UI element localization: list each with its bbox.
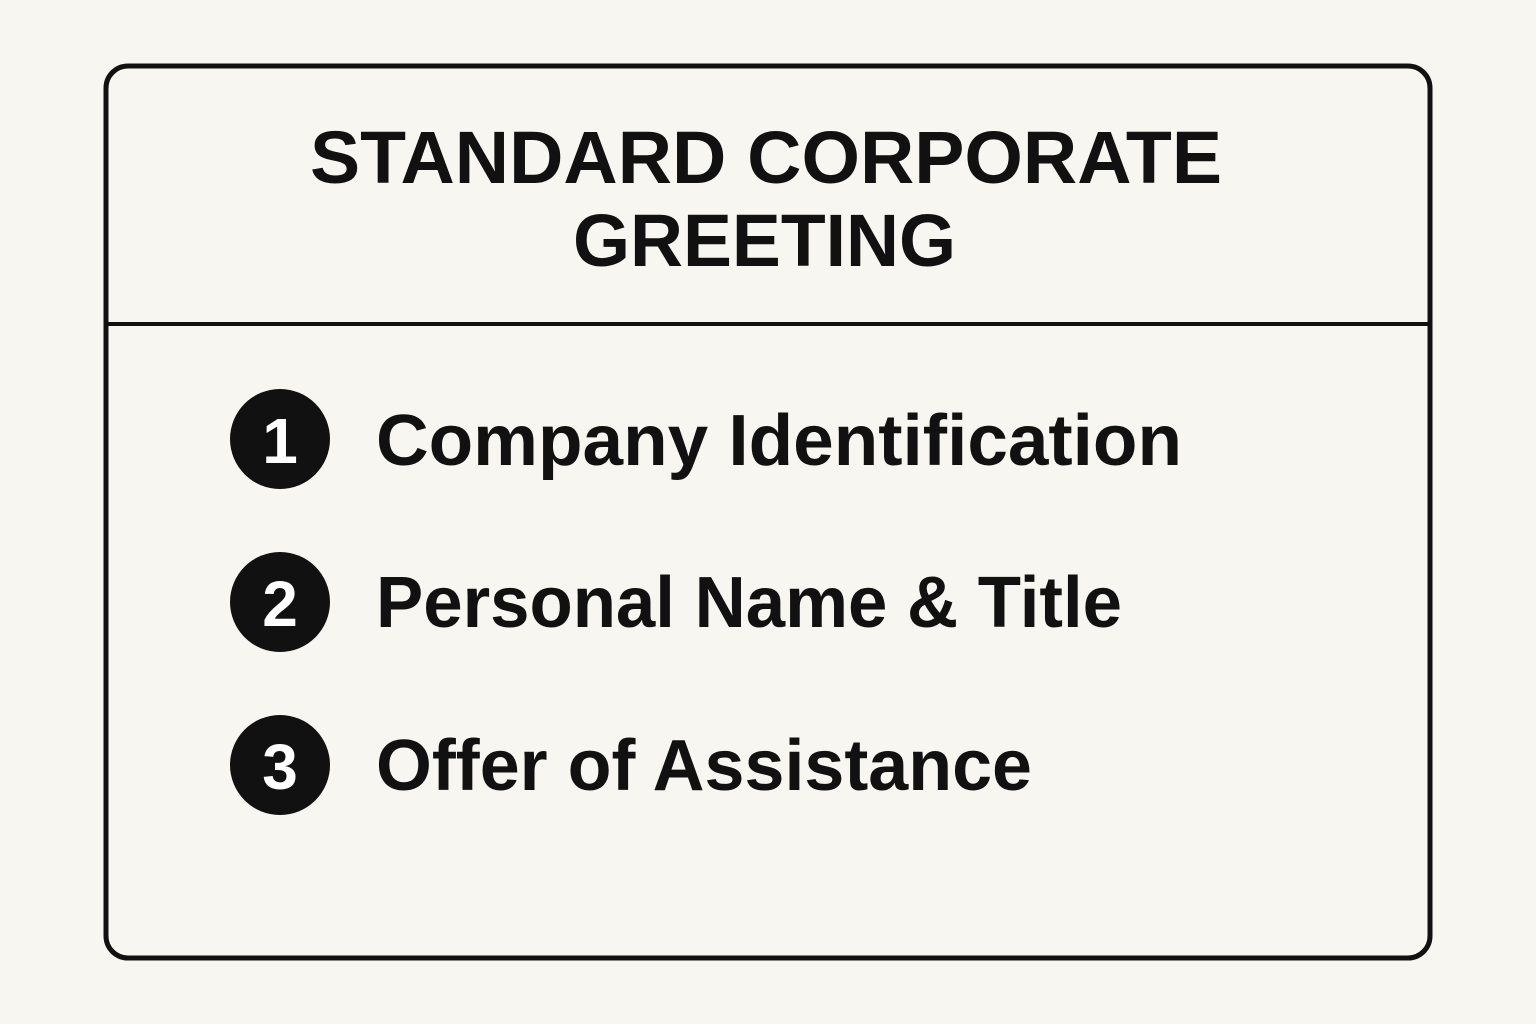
panel: greeting card xyxy=(106,66,1430,958)
item 3: Offer of Assistance xyxy=(230,715,1032,815)
item 3: Offer of Assistance: Offer of Assistance xyxy=(376,726,1032,806)
item 1: Company Identification xyxy=(230,389,1182,489)
title: STANDARD CORPORATE xyxy=(310,116,1222,199)
item 2: Personal Name & Title: 2 xyxy=(262,568,298,640)
item 2: Personal Name & Title: Personal Name & Title xyxy=(376,563,1122,643)
item 3: Offer of Assistance: 3 xyxy=(262,731,298,803)
item 2: Personal Name & Title xyxy=(230,552,1122,652)
title: GREETING xyxy=(573,199,956,282)
item 1: Company Identification: Company Identification xyxy=(376,401,1182,481)
item 1: Company Identification: 1 xyxy=(262,405,298,477)
title xyxy=(310,116,1222,282)
